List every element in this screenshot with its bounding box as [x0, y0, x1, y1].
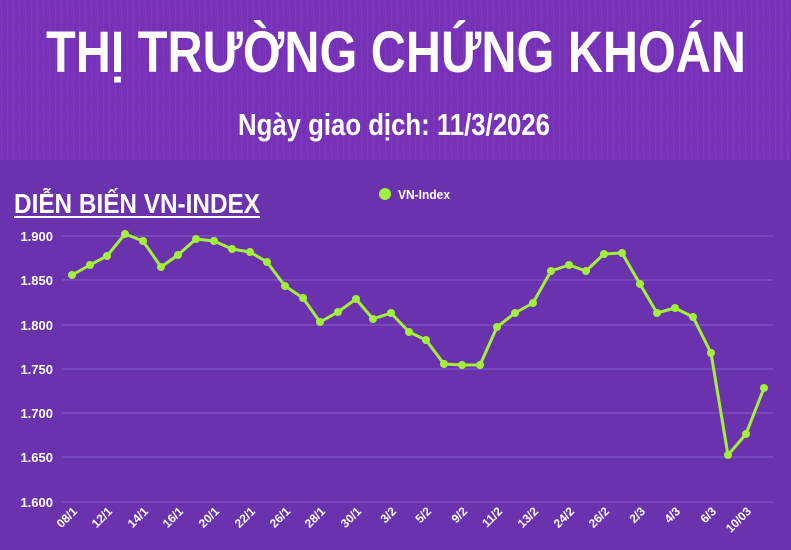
x axis labels: 12/1: [89, 504, 115, 531]
x axis labels: 6/3: [697, 504, 719, 526]
y axis labels: 1.800: [20, 318, 53, 333]
x axis labels: 16/1: [160, 504, 186, 531]
legend: [379, 187, 451, 202]
x axis labels: 24/2: [551, 504, 577, 531]
y axis labels: [20, 229, 53, 510]
y axis labels: 1.850: [20, 273, 53, 288]
line chart: [20, 229, 773, 535]
x axis labels: 22/1: [232, 504, 258, 531]
x axis labels: 30/1: [338, 504, 364, 531]
VN-Index line: [72, 234, 764, 455]
x axis labels: 10/03: [723, 504, 754, 535]
legend: VN-Index: [398, 187, 451, 202]
x axis labels: 5/2: [412, 504, 434, 526]
x axis labels: 26/1: [267, 504, 293, 531]
x axis labels: 20/1: [196, 504, 222, 531]
x axis labels: 08/1: [54, 504, 80, 531]
y axis labels: 1.600: [20, 495, 53, 510]
x axis labels: 13/2: [515, 504, 541, 531]
section heading: DIỄN BIẾN VN-INDEX: [14, 188, 260, 219]
chart panel background: [0, 160, 791, 550]
x axis labels: 9/2: [448, 504, 470, 526]
x axis labels: 2/3: [626, 504, 648, 526]
y axis labels: 1.900: [20, 229, 53, 244]
y axis labels: 1.750: [20, 362, 53, 377]
x axis labels: 11/2: [479, 504, 505, 530]
x axis labels: 4/3: [661, 504, 683, 526]
y axis labels: 1.700: [20, 406, 53, 421]
x axis labels: [54, 504, 754, 535]
x axis labels: 28/1: [302, 504, 328, 531]
x axis labels: 26/2: [586, 504, 612, 531]
x axis labels: 3/2: [377, 504, 399, 526]
x axis labels: 14/1: [125, 504, 151, 531]
subtitle: trading date: Ngày giao dịch: 11/3/2026: [238, 107, 550, 142]
header background: [0, 0, 791, 160]
y axis labels: 1.650: [20, 450, 53, 465]
